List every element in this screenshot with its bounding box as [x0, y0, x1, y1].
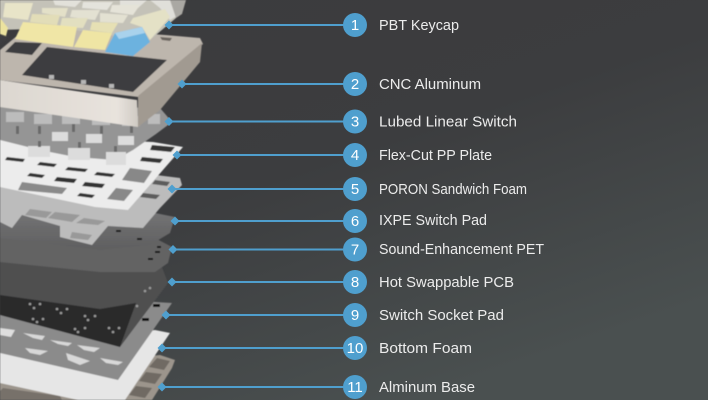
callout 6: IXPE Switch Pad: 6: [351, 213, 359, 230]
callout 5: PORON Sandwich Foam: [168, 177, 527, 201]
callout 3: Lubed Linear Switch: 3: [351, 114, 359, 130]
illustration: exploded keyboard layers: [0, 0, 203, 400]
callout 4: Flex-Cut PP Plate: Flex-Cut PP Plate: [379, 148, 492, 164]
callout 2: CNC Aluminum: [178, 72, 481, 96]
callout 5: PORON Sandwich Foam: PORON Sandwich Foam: [379, 182, 527, 198]
callout 10: Bottom Foam: Bottom Foam: [379, 341, 472, 357]
small dark plate recess: [5, 42, 42, 55]
callout 6: IXPE Switch Pad: [170, 209, 487, 233]
callout 10: Bottom Foam: 10: [347, 340, 363, 357]
layer: sound-enhancement PET: [0, 220, 172, 272]
callout 10: Bottom Foam: [158, 336, 472, 360]
callout 11: Alminum Base: [158, 375, 475, 399]
layer: hot swappable PCB: [0, 255, 168, 347]
callout 8: Hot Swappable PCB: [168, 270, 514, 294]
layer: PORON sandwich foam: [0, 173, 182, 245]
callout 3: Lubed Linear Switch: [164, 110, 517, 134]
callout 2: CNC Aluminum: 2: [351, 76, 359, 93]
callout 11: Alminum Base: 11: [347, 379, 363, 396]
callout 7: Sound-Enhancement PET: 7: [351, 242, 359, 258]
callout 1: PBT Keycap: 1: [351, 17, 359, 34]
callout 7: Sound-Enhancement PET: [168, 238, 544, 262]
layer: IXPE switch pad: [0, 200, 175, 250]
layer: CNC aluminum case: [0, 25, 203, 127]
callout 9: Switch Socket Pad: [162, 303, 504, 327]
layer: aluminum base: [0, 355, 175, 400]
layer: PBT keycaps: [0, 0, 186, 56]
layer: switch socket pad: [0, 302, 172, 380]
callout 7: Sound-Enhancement PET: Sound-Enhancement PET: [379, 242, 544, 258]
callout 4: Flex-Cut PP Plate: 4: [351, 147, 359, 164]
layer: lubed linear switches: [0, 105, 172, 165]
layer: bottom foam: [0, 330, 170, 400]
dark plate recess: [22, 47, 167, 92]
callout 1: PBT Keycap: [164, 13, 459, 37]
callout 8: Hot Swappable PCB: 8: [351, 274, 359, 291]
callout 1: PBT Keycap: PBT Keycap: [379, 18, 459, 34]
callout 3: Lubed Linear Switch: Lubed Linear Switch: [379, 114, 517, 130]
callout 11: Alminum Base: Alminum Base: [379, 380, 475, 396]
layer: flex-cut PP plate: [0, 135, 183, 210]
callout 6: IXPE Switch Pad: IXPE Switch Pad: [379, 213, 487, 229]
callout 4: Flex-Cut PP Plate: [172, 143, 492, 167]
callout 8: Hot Swappable PCB: Hot Swappable PCB: [379, 275, 514, 291]
callout 9: Switch Socket Pad: Switch Socket Pad: [379, 308, 504, 324]
callout 2: CNC Aluminum: CNC Aluminum: [379, 77, 481, 93]
callout 9: Switch Socket Pad: 9: [351, 307, 359, 324]
callout 5: PORON Sandwich Foam: 5: [351, 181, 359, 198]
